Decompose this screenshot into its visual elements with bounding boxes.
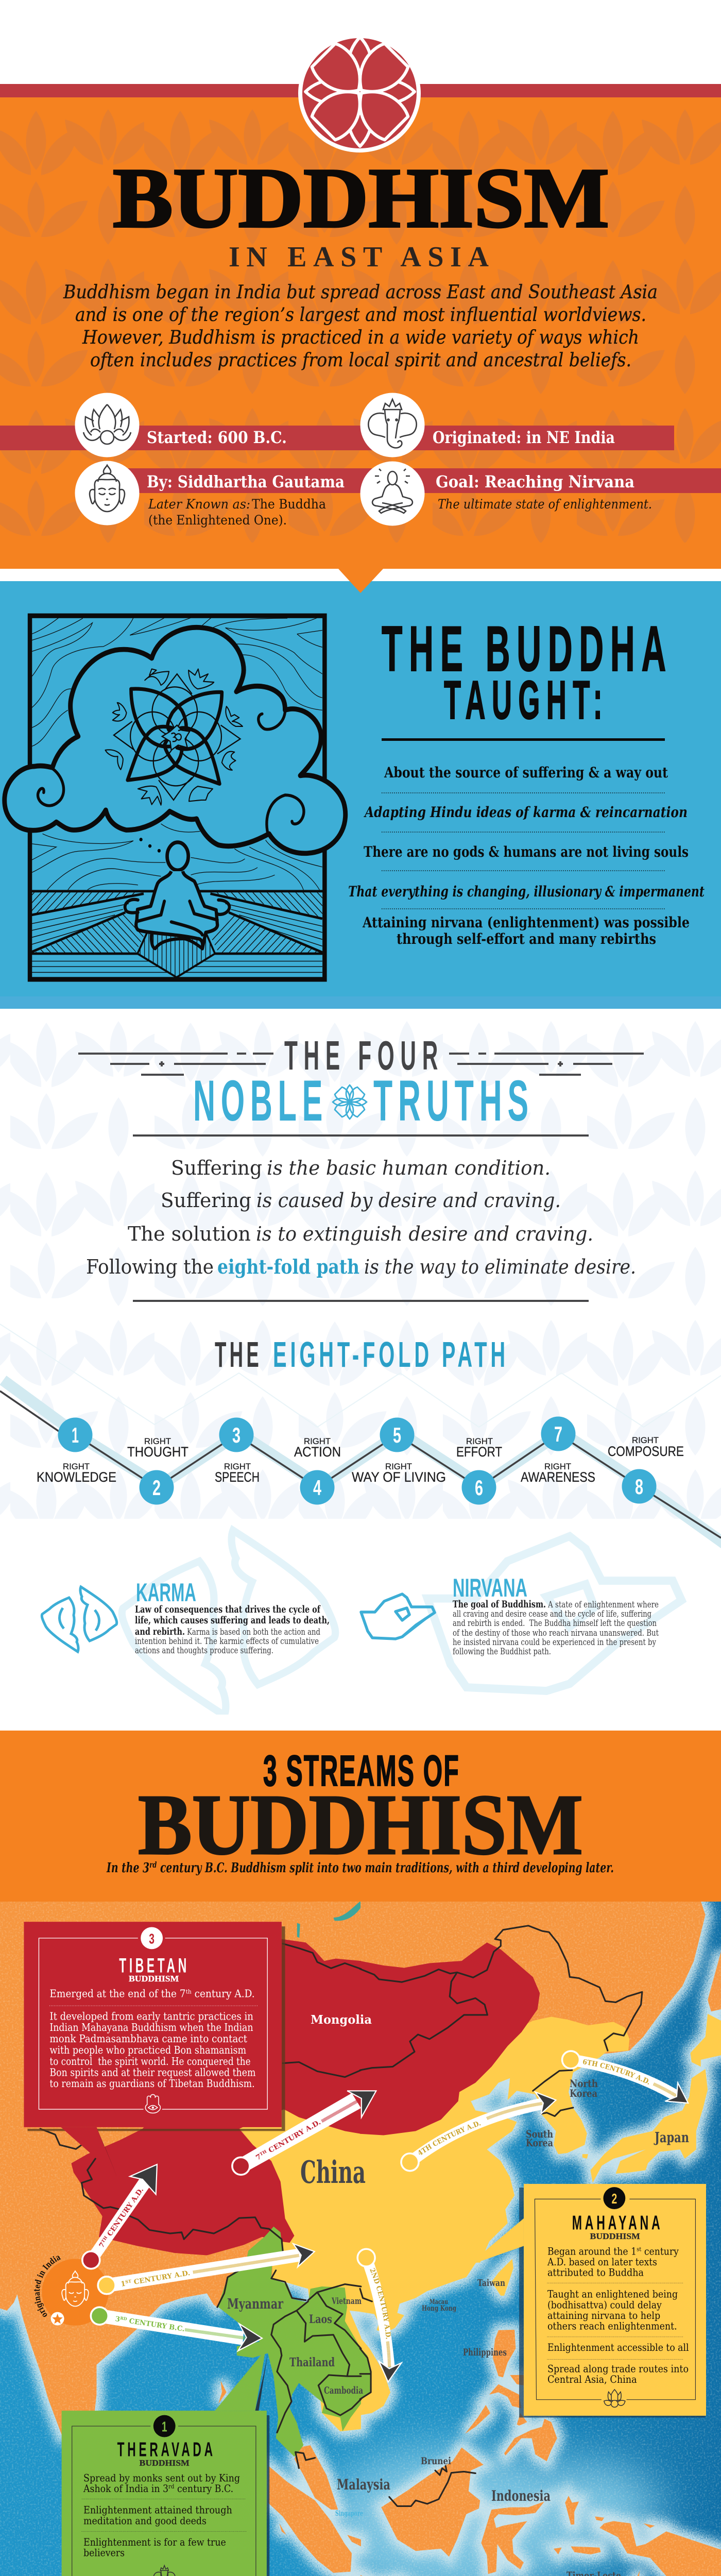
callout: Tibetan Buddhism: Indian Mahayana Buddhism when the Indian: [49, 2021, 253, 2033]
text block: the four truths: is the way to eliminate desire.: [364, 1256, 636, 1278]
stat: goal: Goal: Reaching Nirvana: [436, 472, 634, 492]
arrow: 1st century: [98, 2244, 315, 2294]
arrow: 6th century: [561, 2050, 689, 2104]
arrow: 4th century: [400, 2091, 557, 2172]
stat: started: Started: 600 B.C.: [147, 428, 287, 447]
stat: started: [75, 393, 287, 457]
callout: Tibetan Buddhism: Emerged at the end of the 7: [49, 1988, 197, 2000]
text block: karma: KARMA: [136, 1578, 196, 1607]
heading: 3 streams of Buddhism: BUDDHISM: [138, 1777, 583, 1873]
callout: Mahayana Buddhism: 2: [612, 2191, 617, 2207]
callout: Theravada Buddhism: rd: [168, 2483, 175, 2490]
country borders: [40, 1926, 642, 2506]
text block: karma: and rebirth.: [135, 1626, 185, 1637]
arrow: 7th century to Tibet: CENTURY A.D.: [105, 2186, 145, 2240]
text block: the four truths: is the basic human condition.: [267, 1157, 551, 1179]
callout: Mahayana Buddhism: Central Asia, China: [547, 2374, 637, 2385]
chart: eight-fold zigzag path: EFFORT: [456, 1444, 502, 1460]
callout: Mahayana Buddhism: Began around the 1: [547, 2245, 649, 2257]
origin badge: originated in India: [32, 2251, 115, 2326]
stat: founder: [75, 461, 345, 528]
heading: 3 streams of Buddhism: In the 3: [107, 1860, 166, 1876]
callout: Tibetan Buddhism: to remain as guardians of Tibetan Buddhism.: [49, 2077, 255, 2090]
stat: goal: The ultimate state of enlightenment.: [438, 497, 652, 512]
arrow: 7th century to Mongolia: CENTURY A.D.: [265, 2118, 322, 2156]
panel: the Buddha taught: [0, 581, 721, 1009]
callout: Theravada Buddhism: THERAVADA: [117, 2438, 216, 2461]
heading: The Four Noble Truths: TRUTHS: [373, 1069, 534, 1133]
heading ornament lines: [78, 1054, 644, 1075]
callout: Theravada Buddhism: meditation and good deeds: [83, 2515, 207, 2527]
text block: the four truths: is caused by desire and craving.: [256, 1189, 561, 1212]
chart: eight-fold zigzag path: RIGHT: [144, 1436, 171, 1446]
chart: eight-fold zigzag path: WAY OF LIVING: [352, 1469, 446, 1485]
arrow: 1st century: 1: [120, 2280, 126, 2289]
arrow: 3rd century: CENTURY B.C.: [126, 2316, 185, 2333]
callout: Tibetan Buddhism: with people who practiced Bon shamanism: [49, 2044, 246, 2056]
chart: eight-fold zigzag path: RIGHT: [224, 1462, 251, 1471]
list: teachings: [348, 764, 705, 947]
text block: nirvana: and rebirth is ended. The Buddha himself left the question: [453, 1618, 657, 1629]
country labels: Brunei: [421, 2455, 451, 2467]
callout: Mahayana Buddhism: Enlightenment accessible to all: [547, 2342, 689, 2353]
callout: Mahayana Buddhism: attaining nirvana to help: [547, 2310, 660, 2321]
panel: 3 streams heading band: [0, 1731, 721, 1902]
chart: eight-fold zigzag path: 8: [635, 1475, 643, 1499]
heading: 3 streams of Buddhism: rd: [149, 1860, 157, 1870]
chart: eight-fold zigzag path: THOUGHT: [127, 1444, 188, 1460]
water: lakes: [297, 1901, 360, 1938]
intro paragraph: Buddhism began in India but spread across East and Southeast Asia: [63, 282, 658, 303]
country labels: Myanmar: [227, 2296, 284, 2312]
stat: founder: The Buddha: [252, 497, 326, 512]
country labels: Thailand: [289, 2355, 335, 2369]
text block: the four truths: Suffering: [161, 1189, 251, 1212]
arrow: 1st century: CENTURY A.D.: [131, 2269, 191, 2287]
callout: Tibetan Buddhism: monk Padmasambhava came into contact: [49, 2032, 247, 2045]
divider lines: [133, 1134, 589, 1302]
header panel: orange background: [0, 84, 721, 569]
callout: Tibetan Buddhism: BUDDHISM: [129, 1974, 179, 1984]
arrow: 7th century to Mongolia: TH: [259, 2148, 268, 2157]
icon: red lotus medallion: [298, 34, 421, 152]
chart: eight-fold zigzag path: AWARENESS: [521, 1469, 595, 1485]
panel: four noble truths background: [0, 1009, 721, 1519]
country labels: Taiwan: [477, 2278, 505, 2289]
callout: Theravada Buddhism: Enlightenment attained through: [83, 2504, 232, 2516]
country labels: Malaysia: [337, 2476, 390, 2493]
heading: The Buddha taught: [382, 614, 673, 731]
chart: eight-fold zigzag path: 7: [554, 1422, 562, 1446]
stat: founder: Later Known as:: [148, 497, 250, 512]
callout: Mahayana Buddhism: (bodhisattva) could delay: [547, 2299, 662, 2311]
arrow: 7th century to Tibet: [82, 2164, 157, 2269]
chart: eight-fold zigzag path: RIGHT: [304, 1436, 331, 1446]
text block: karma: actions and thoughts produce suffering.: [135, 1646, 273, 1656]
chart: eight-fold zigzag path: RIGHT: [544, 1462, 571, 1471]
stat: originated: Originated: in NE India: [433, 428, 615, 447]
country labels: Vietnam: [331, 2296, 362, 2307]
divider: [382, 738, 665, 741]
chart: eight-fold zigzag path: ACTION: [294, 1444, 341, 1460]
icon: nirvana hand: [361, 1594, 435, 1639]
list: teachings: About the source of suffering & a way out: [384, 764, 668, 781]
chart: eight-fold zigzag path: 5: [393, 1423, 401, 1447]
callout: Mahayana Buddhism: century: [641, 2245, 679, 2257]
map: East and Southeast Asia: [0, 1902, 721, 2576]
region: Theravada green: [217, 2227, 371, 2456]
text block: the four truths: Suffering: [171, 1157, 262, 1179]
country labels: Korea: [526, 2137, 553, 2149]
callout: Theravada Buddhism: century B.C.: [174, 2483, 233, 2495]
title: Buddhism: BUDDHISM: [113, 150, 609, 245]
arrow: 3rd century: RD: [120, 2315, 127, 2321]
ghost icons: pale fish and hand: [122, 1530, 681, 1716]
heading: The Four Noble Truths: THE FOUR: [284, 1032, 444, 1078]
text block: the four truths: eight-fold path: [217, 1255, 359, 1278]
text block: karma: intention behind it. The karmic effects of cumulative: [135, 1636, 319, 1647]
arrow: 7th century to Tibet: TH: [100, 2235, 109, 2244]
country labels: South: [526, 2128, 553, 2140]
chart: eight-fold zigzag path: RIGHT: [632, 1435, 659, 1445]
origin badge: originated in India: originated in India: [34, 2256, 61, 2317]
text block: nirvana: A state of enlightenment where: [547, 1600, 659, 1610]
chart: eight-fold zigzag path: 3: [232, 1423, 241, 1447]
stat: founder: By: Siddhartha Gautama: [147, 472, 345, 492]
callout: Theravada Buddhism: believers: [83, 2547, 125, 2559]
arrow: 4th century: 4TH CENTURY A.D.: [419, 2122, 481, 2155]
arrow: header pointer: [338, 569, 383, 593]
arrow: 6th century: 6TH CENTURY A.D.: [583, 2059, 649, 2084]
chart: eight-fold zigzag path: 2: [152, 1476, 161, 1500]
callout: Mahayana Buddhism: [468, 2184, 706, 2418]
country labels: [227, 2013, 689, 2576]
arrow: 2nd century: [356, 2248, 403, 2383]
country labels: Philippines: [463, 2347, 507, 2358]
icon: karma fish: [42, 1587, 117, 1652]
text block: nirvana: following the Buddhist path.: [453, 1647, 551, 1657]
callout: Mahayana Buddhism: Taught an enlightened being: [547, 2288, 678, 2300]
callout: Tibetan Buddhism: century A.D.: [192, 1988, 255, 2000]
callout: Mahayana Buddhism: st: [637, 2245, 642, 2252]
callout: Tibetan Buddhism: 3: [149, 1931, 154, 1947]
chart: eight-fold zigzag path: 4: [313, 1476, 321, 1500]
chart: eight-fold zigzag path: RIGHT: [385, 1462, 412, 1471]
chart: eight-fold zigzag path: SPEECH: [215, 1469, 260, 1485]
arrow: 7th century to Tibet: 7: [97, 2241, 107, 2249]
text block: nirvana: he insisted nirvana could be experienced in the present by: [453, 1637, 656, 1648]
arrow: 7th century to Mongolia: 7: [254, 2153, 263, 2162]
chart: eight-fold zigzag path: KNOWLEDGE: [37, 1469, 116, 1485]
callout: Mahayana Buddhism: BUDDHISM: [590, 2231, 640, 2241]
illustration: meditating figure with thought cloud: [5, 616, 346, 979]
callout: Theravada Buddhism: Ashok of India in 3: [83, 2483, 180, 2495]
callout: Tibetan Buddhism: th: [186, 1988, 192, 1995]
text block: karma: life, which causes suffering and leads to death,: [135, 1615, 330, 1626]
callout: Tibetan Buddhism: Bon spirits and at their request allowed them: [49, 2066, 255, 2079]
stat: goal: [360, 462, 652, 526]
chart: eight-fold zigzag path: [0, 1324, 721, 1544]
text block: the four truths: Following the: [86, 1256, 214, 1278]
text block: nirvana: all craving and desire cease and the cycle of life, suffering: [453, 1609, 651, 1619]
country labels: Singapore: [335, 2510, 363, 2518]
intro paragraph: [63, 282, 658, 371]
country labels: China: [300, 2155, 366, 2191]
country labels: Hong Kong: [422, 2304, 456, 2313]
country labels: Japan: [654, 2130, 689, 2146]
country labels: North: [570, 2077, 598, 2090]
callout: Mahayana Buddhism: others reach enlightenment.: [547, 2320, 677, 2332]
stat bars: [0, 426, 721, 493]
text block: the four truths: is to extinguish desire and craving.: [256, 1223, 593, 1245]
callout: Mahayana Buddhism: attributed to Buddha: [547, 2267, 644, 2279]
heading: the eight-fold path: THE: [215, 1334, 262, 1375]
arrow: 3rd century: 3: [115, 2315, 121, 2324]
country labels: Korea: [570, 2087, 597, 2099]
arrow: 7th century to Mongolia: [232, 2091, 376, 2175]
text block: nirvana: The goal of Buddhism.: [453, 1599, 546, 1610]
heading: The Four Noble Truths: NOBLE: [193, 1069, 328, 1133]
callout: Theravada Buddhism: Spread by monks sent out by King: [83, 2472, 240, 2484]
chart: eight-fold zigzag path: RIGHT: [63, 1462, 90, 1471]
text block: nirvana: of the destiny of those who reach nirvana unanswered. But: [453, 1628, 659, 1638]
heading: the eight-fold path: EIGHT-FOLD PATH: [273, 1334, 509, 1375]
list: teachings: through self-effort and many rebirths: [397, 930, 656, 947]
country labels: Indonesia: [491, 2487, 551, 2504]
arrow: 1st century: ST: [125, 2278, 132, 2284]
chart: eight-fold zigzag path: RIGHT: [466, 1436, 493, 1446]
callout: Tibetan Buddhism: It developed from early tantric practices in: [49, 2010, 253, 2022]
callout: Tibetan Buddhism: TIBETAN: [119, 1954, 190, 1977]
text block: the four truths: The solution: [128, 1223, 251, 1245]
country labels: Mongolia: [311, 2013, 372, 2027]
arrow: 2nd century: 2ND CENTURY A.D.: [370, 2268, 391, 2339]
heading: 3 streams of Buddhism: 3 STREAMS OF: [263, 1747, 460, 1795]
arrow: 3rd century: [91, 2307, 262, 2351]
stat: originated: [360, 393, 615, 457]
text block: the four truths: [86, 1157, 636, 1278]
chart: eight-fold zigzag path: 6: [475, 1476, 483, 1500]
callout: Mahayana Buddhism: Spread along trade routes into: [547, 2363, 689, 2375]
text block: karma: Law of consequences that drives the cycle of: [135, 1604, 321, 1615]
callout: Theravada Buddhism: Enlightenment is for a few true: [83, 2536, 226, 2548]
country labels: Cambodia: [324, 2385, 363, 2396]
heading: the eight-fold path: [215, 1334, 509, 1375]
country labels: Laos: [309, 2313, 332, 2326]
icon: blue mandala: [333, 1085, 367, 1119]
stat: founder: (the Enlightened One).: [148, 513, 287, 528]
callout: Theravada Buddhism: BUDDHISM: [140, 2458, 190, 2468]
heading: The Four Noble Truths: [193, 1032, 534, 1133]
intro paragraph: often includes practices from local spirit and ancestral beliefs.: [90, 350, 631, 371]
text block: karma: [135, 1578, 330, 1656]
intro paragraph: However, Buddhism is practiced in a wide variety of ways which: [82, 327, 639, 348]
callout: Tibetan Buddhism: [24, 1922, 285, 2177]
callout: Theravada Buddhism: 1: [162, 2418, 167, 2434]
region: Tibetan red: [71, 1939, 540, 2256]
country labels: Macau: [430, 2298, 448, 2306]
heading: 3 streams of Buddhism: [106, 1747, 614, 1876]
callout: Tibetan Buddhism: to control the spirit world. He conquered the: [49, 2055, 251, 2067]
intro paragraph: and is one of the region’s largest and most influential worldviews.: [75, 304, 646, 326]
chart: eight-fold zigzag path: 1: [72, 1423, 79, 1447]
callout: Theravada Buddhism: [62, 2350, 269, 2576]
chart: eight-fold zigzag path: COMPOSURE: [608, 1444, 684, 1459]
subtitle: in East Asia: IN EAST ASIA: [229, 241, 489, 273]
text block: karma: Karma is based on both the action and: [187, 1627, 320, 1637]
text block: nirvana: NIRVANA: [453, 1573, 527, 1602]
text block: nirvana: [453, 1573, 659, 1657]
callout: Mahayana Buddhism: A.D. based on later texts: [547, 2256, 657, 2268]
